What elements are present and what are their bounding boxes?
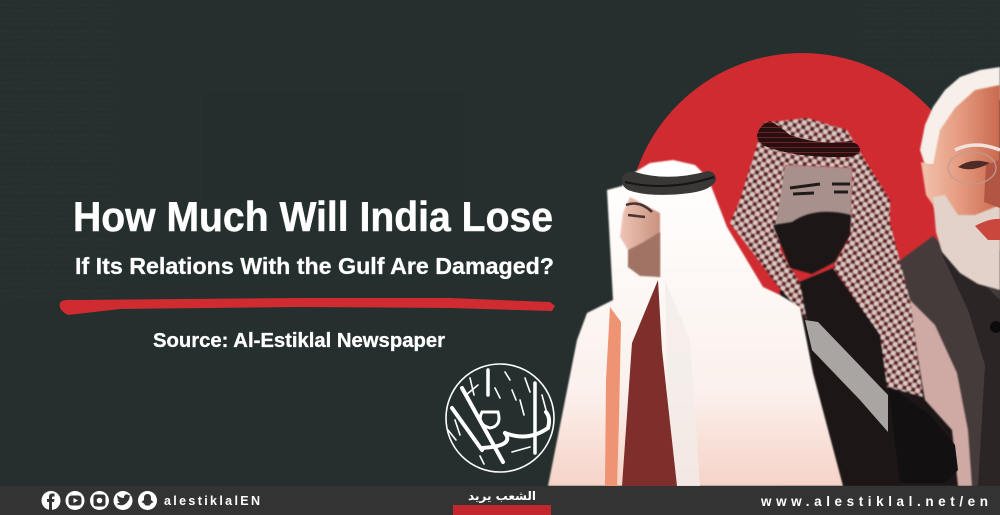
head band [757, 121, 860, 157]
beard [933, 195, 1000, 290]
headdress [730, 118, 923, 397]
red brush stroke [60, 298, 555, 315]
button [990, 321, 1000, 333]
source line: Source: Al-Estiklal Newspaper [153, 330, 445, 352]
figure: right leader in dark coat [898, 67, 1000, 486]
social handle: alestiklalEN [164, 494, 262, 508]
logo: calligraphy seal [446, 364, 554, 472]
pale cloak [908, 298, 972, 486]
mouth [975, 219, 1000, 240]
arabic slogan: الشعب يريد [468, 489, 536, 503]
social icons [42, 491, 157, 510]
coat [898, 236, 1000, 486]
face [620, 197, 660, 277]
nose [984, 160, 1000, 208]
shadow fold [665, 280, 700, 486]
head band [622, 171, 716, 195]
sash [805, 320, 888, 432]
red circle [627, 53, 977, 403]
inner robe [622, 280, 677, 486]
face [775, 165, 852, 268]
figure: left leader in white robe [548, 160, 843, 486]
red footer tab [453, 505, 551, 515]
robe [548, 160, 843, 486]
figure: centre leader in black robe and checkered headdress [730, 118, 972, 486]
website url: www.alestiklal.net/en [760, 494, 988, 509]
beard [628, 232, 660, 277]
ear and face [921, 85, 1000, 250]
brows and eyes [790, 184, 850, 194]
robe [780, 268, 965, 486]
orange trim [605, 307, 621, 486]
eye and glasses [948, 145, 1000, 184]
icon: twitter [114, 491, 132, 510]
icon: facebook [42, 491, 60, 510]
icon: instagram [90, 491, 109, 510]
footer bar [0, 486, 1000, 515]
brow and hair shadow [626, 204, 652, 217]
hair [920, 67, 1000, 165]
main title: How Much Will India Lose [73, 193, 553, 240]
icon: youtube [66, 491, 84, 510]
beard [773, 212, 851, 274]
icon: snapchat [138, 491, 157, 510]
subtitle: If Its Relations With the Gulf Are Damaged? [75, 253, 554, 279]
